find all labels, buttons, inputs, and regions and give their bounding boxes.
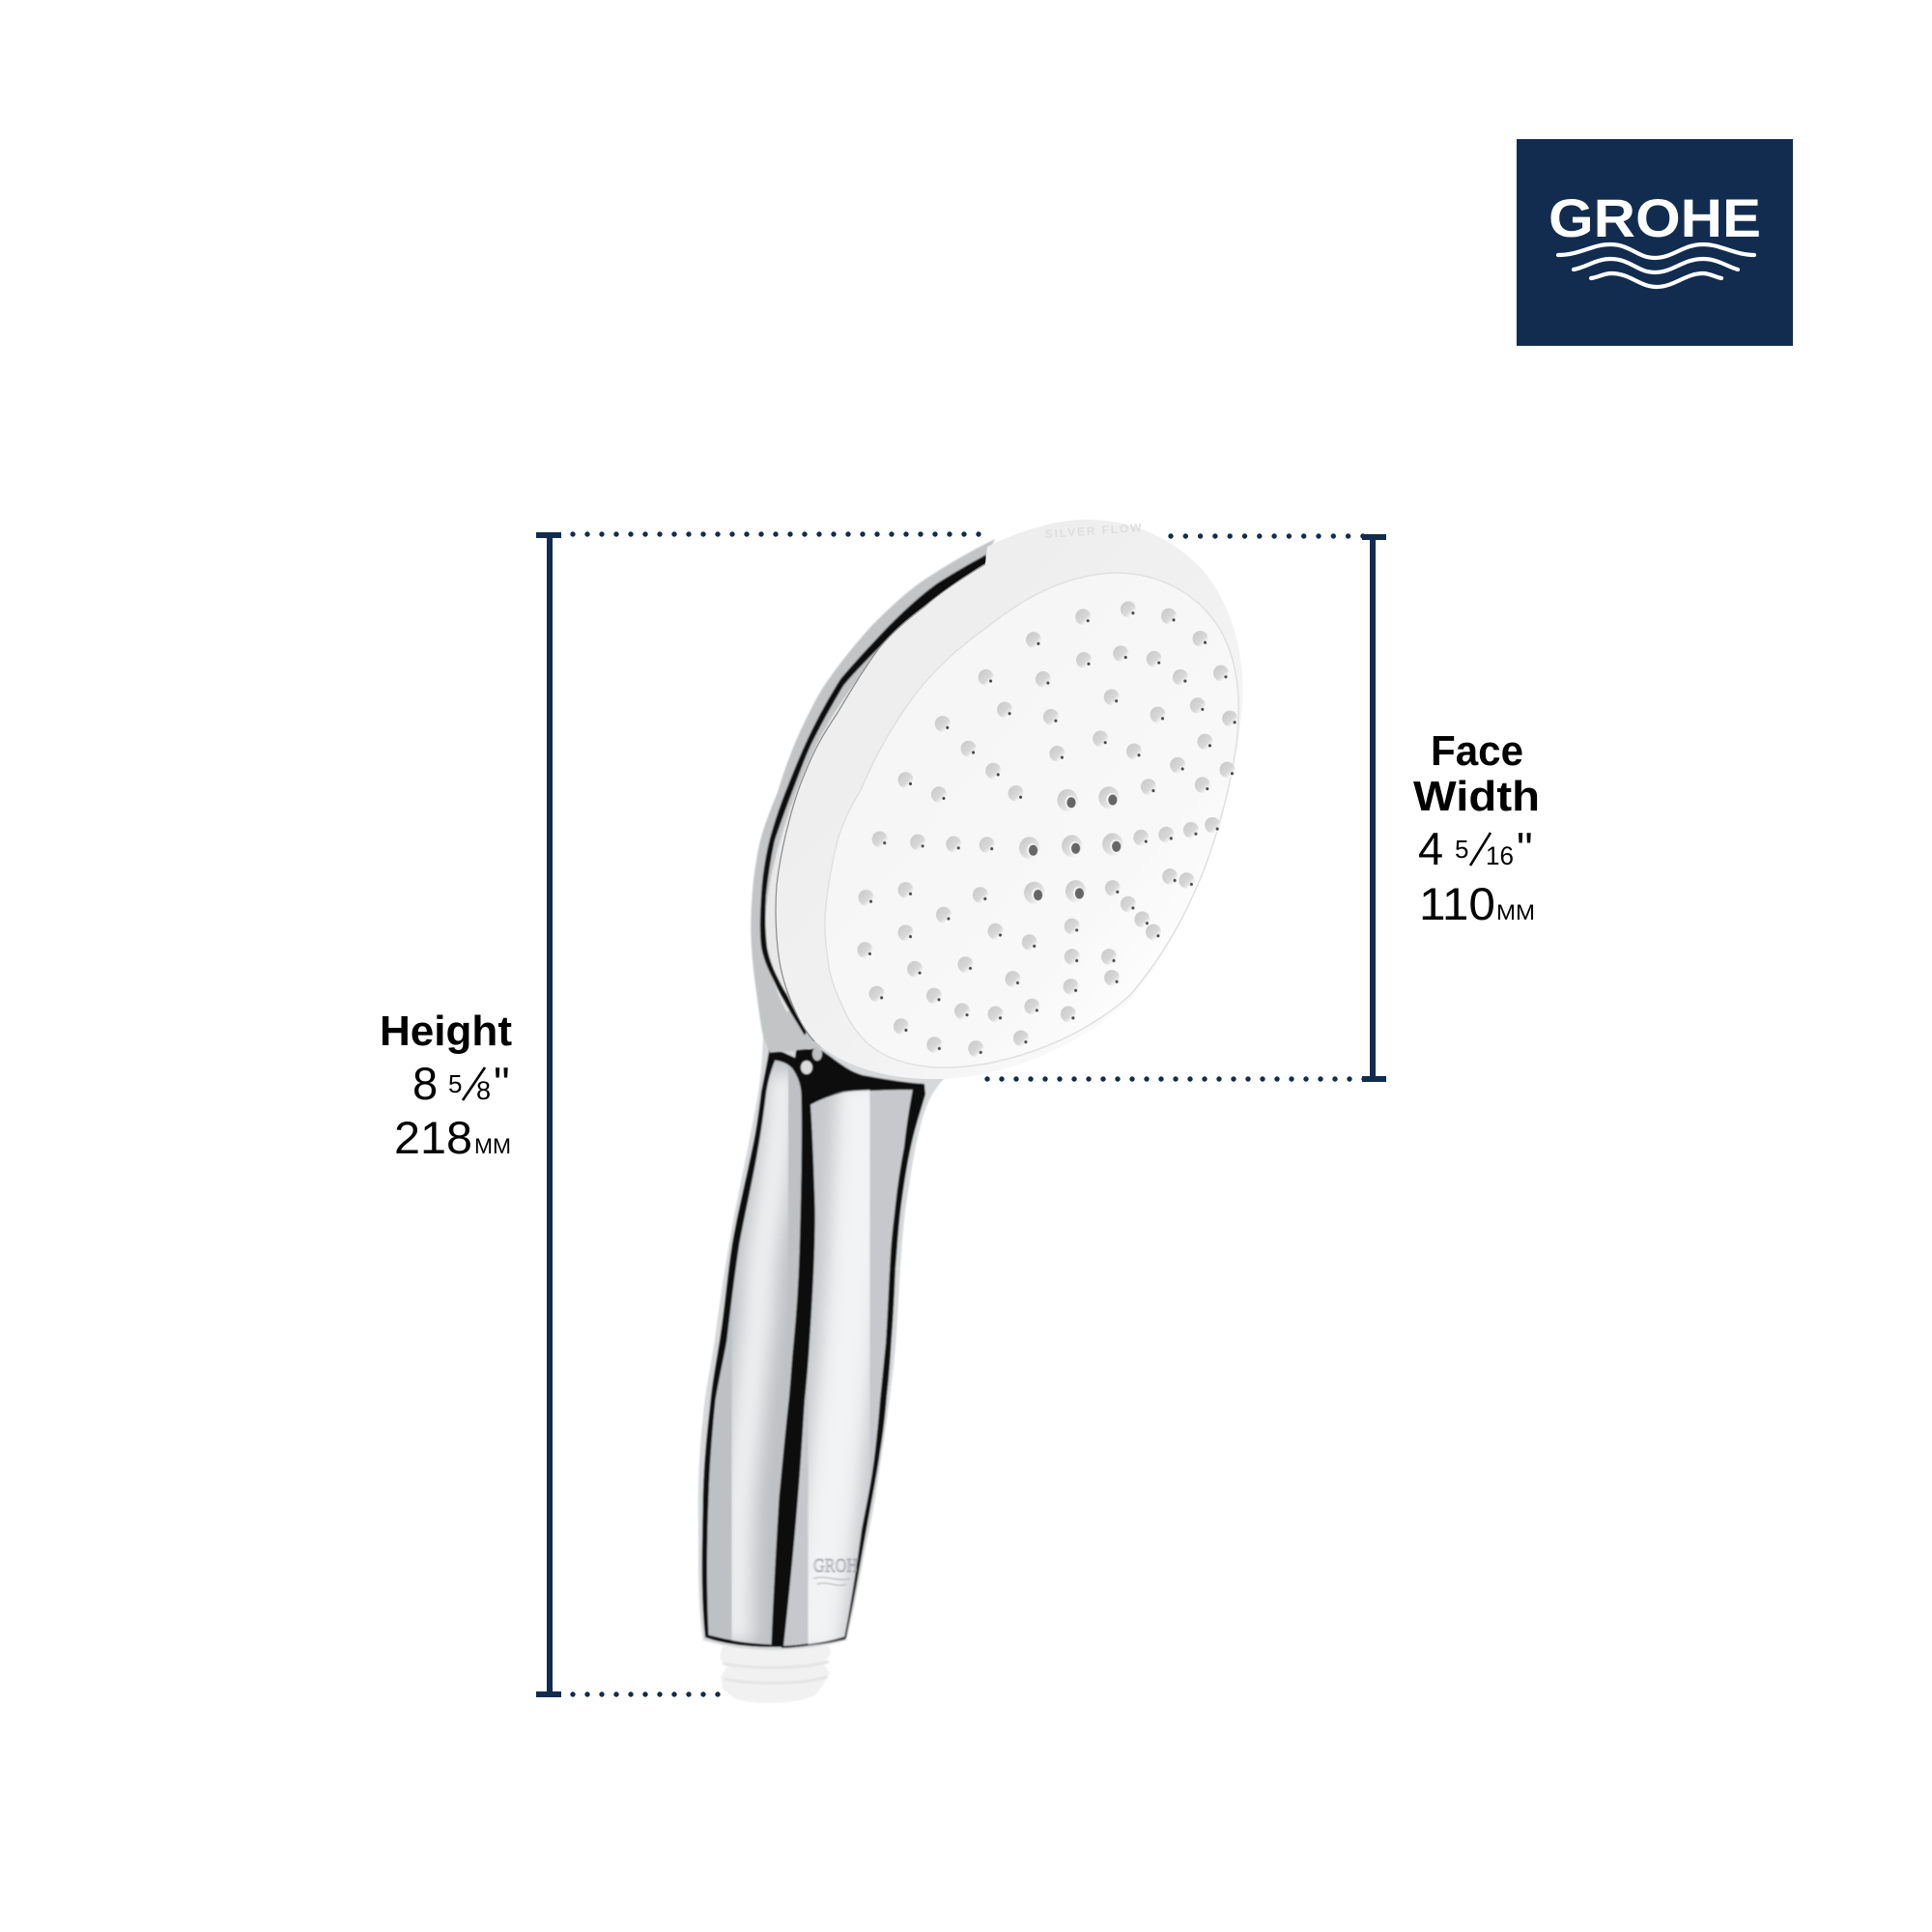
height label: Height (380, 1008, 512, 1055)
height dimension bracket (536, 534, 991, 1694)
embossed handle logo: GROHE (813, 1555, 867, 1577)
spray nozzles (857, 601, 1237, 1057)
face width label: " (1517, 823, 1533, 874)
handle right lobe (782, 1089, 914, 1647)
chrome handle (698, 1024, 945, 1652)
handle left lobe (707, 1060, 802, 1645)
embossed handle logo (813, 1557, 860, 1586)
face width label: Face (1431, 727, 1523, 775)
embossed text on rim: SILVER FLOW (1044, 521, 1143, 541)
logo wordmark: GROHE (1548, 187, 1761, 248)
face width label: Width (1413, 773, 1540, 820)
height label: MM (474, 1134, 511, 1158)
height label: 218 (394, 1112, 472, 1163)
inner face plate (825, 573, 1238, 1067)
infographic canvas (383, 139, 1793, 1702)
height label: 8 (476, 1076, 491, 1105)
product: hand shower (698, 520, 1243, 1703)
height label: 8 (412, 1058, 438, 1109)
black reflection strip (760, 554, 986, 1036)
face width label: 110 (1419, 878, 1495, 929)
white shower face (776, 520, 1243, 1079)
height label (380, 1008, 512, 1163)
logo waves (1558, 244, 1754, 287)
face width label: MM (1496, 900, 1535, 924)
height label: " (494, 1058, 510, 1109)
face width label (1413, 727, 1540, 929)
collar highlights (801, 1039, 822, 1074)
chrome rim behind head (751, 539, 995, 1053)
height label: 5 (448, 1069, 462, 1098)
face width dimension bracket (987, 536, 1386, 1079)
face width label: 16 (1486, 841, 1514, 870)
face width label: 4 (1418, 823, 1443, 874)
logo: GROHE badge (1517, 139, 1793, 346)
threaded connector (720, 1646, 831, 1703)
handle dark reflections (702, 1038, 925, 1647)
face edge line (776, 564, 985, 1041)
face width label: 5 (1455, 835, 1468, 864)
